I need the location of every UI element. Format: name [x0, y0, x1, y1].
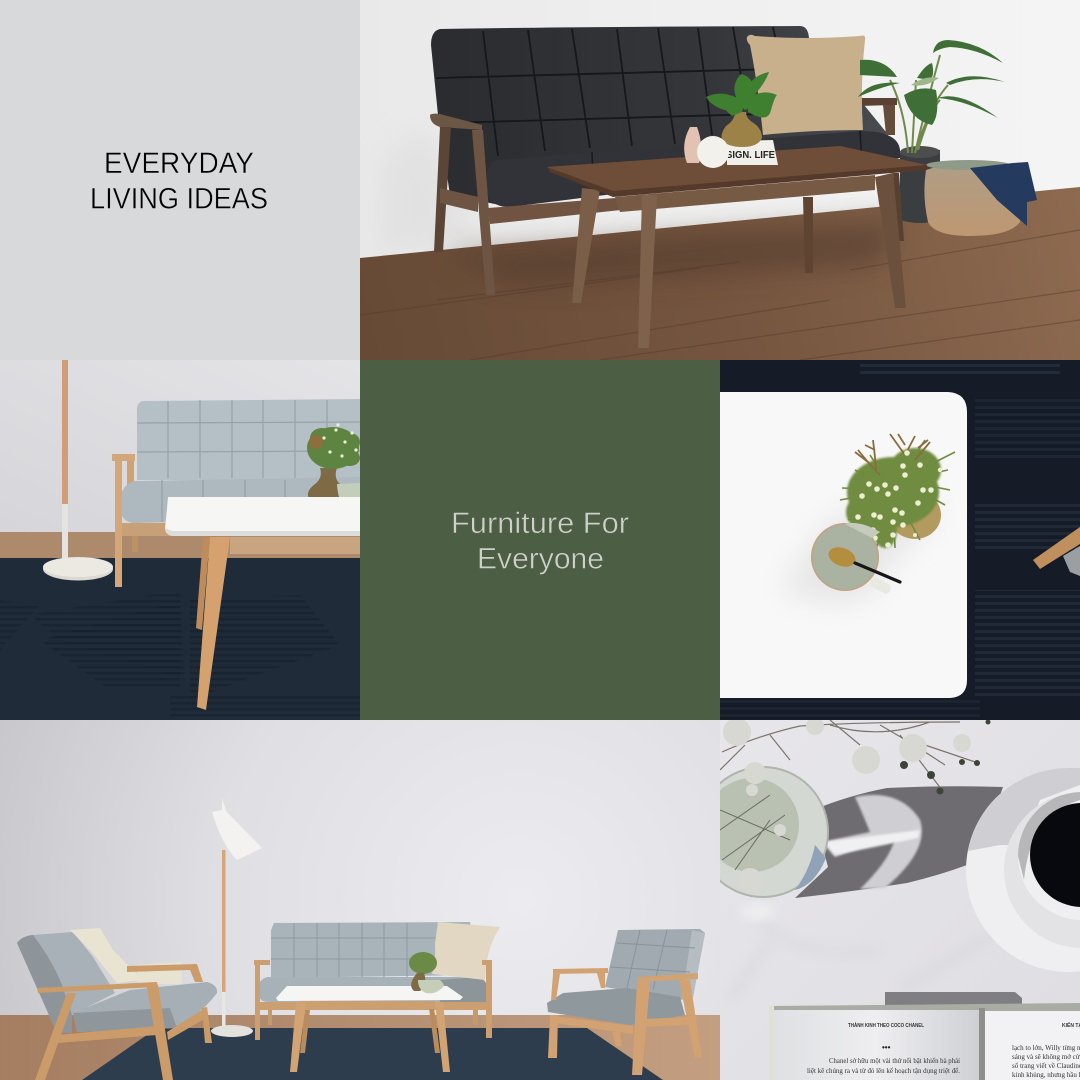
coffee table: walnut [547, 146, 927, 348]
glass vase [720, 766, 829, 898]
tabletop decor [684, 72, 778, 168]
table top: white [720, 392, 967, 698]
vase shadow [795, 786, 1003, 898]
armchair: right [547, 929, 705, 1075]
heading: everyday living ideas: EVERYDAY [104, 147, 254, 180]
plant in brass vase [307, 423, 360, 497]
chair arm at edge [1033, 527, 1080, 576]
cushion: tan pillow [747, 35, 865, 135]
floor lamp [43, 360, 113, 580]
floor lamp [211, 798, 262, 1037]
armchair: left, with throw [17, 928, 217, 1080]
open book: ••• [882, 1043, 891, 1052]
heading: everyday living ideas: LIVING IDEAS [90, 182, 268, 216]
sofa: light grey fabric [112, 399, 360, 587]
tabletop decor: SIGN. LIFE [726, 149, 775, 161]
subheading: furniture for everyone [451, 507, 629, 576]
basket with navy blanket [924, 160, 1037, 236]
cup with spoon [811, 523, 900, 594]
panel: overhead table photo [720, 360, 1080, 720]
panel: full living room photo [0, 720, 720, 1080]
brass pot [896, 501, 941, 539]
panel: dark leather sofa room photo [360, 0, 1080, 360]
panel: grey sofa close-up photo [0, 360, 360, 720]
coffee table: white [276, 952, 463, 1072]
rug stripes [720, 362, 1080, 720]
subheading: furniture for everyone: Furniture For [451, 507, 629, 540]
coffee cup on saucer [966, 768, 1080, 972]
open book: Chanel sở hữu một vài thứ nổi bật khiến bà phải [829, 1057, 960, 1065]
rug texture [55, 600, 198, 698]
rug [82, 1028, 663, 1080]
panel: title block [0, 0, 360, 360]
sofa: black leather [430, 26, 900, 295]
open book: liệt kê chúng ra và từ đó lên kế hoạch tận dụng triệt để. [807, 1067, 960, 1075]
heading: everyday living ideas [90, 147, 268, 216]
gypsophila sprigs [720, 720, 990, 872]
open book: THÀNH KINH THEO COCO CHANEL [848, 1022, 924, 1029]
plant: overhead with white flowers [840, 434, 955, 553]
panel: green tagline block [360, 360, 720, 720]
panel: coffee and book still life photo [698, 717, 1080, 1080]
coffee table: white with oak legs [165, 497, 360, 710]
open book [769, 992, 1080, 1080]
sofa: three-seater [254, 922, 500, 1040]
subheading: furniture for everyone: Everyone [477, 542, 604, 576]
plant: banana leaf with pot [858, 40, 1005, 223]
